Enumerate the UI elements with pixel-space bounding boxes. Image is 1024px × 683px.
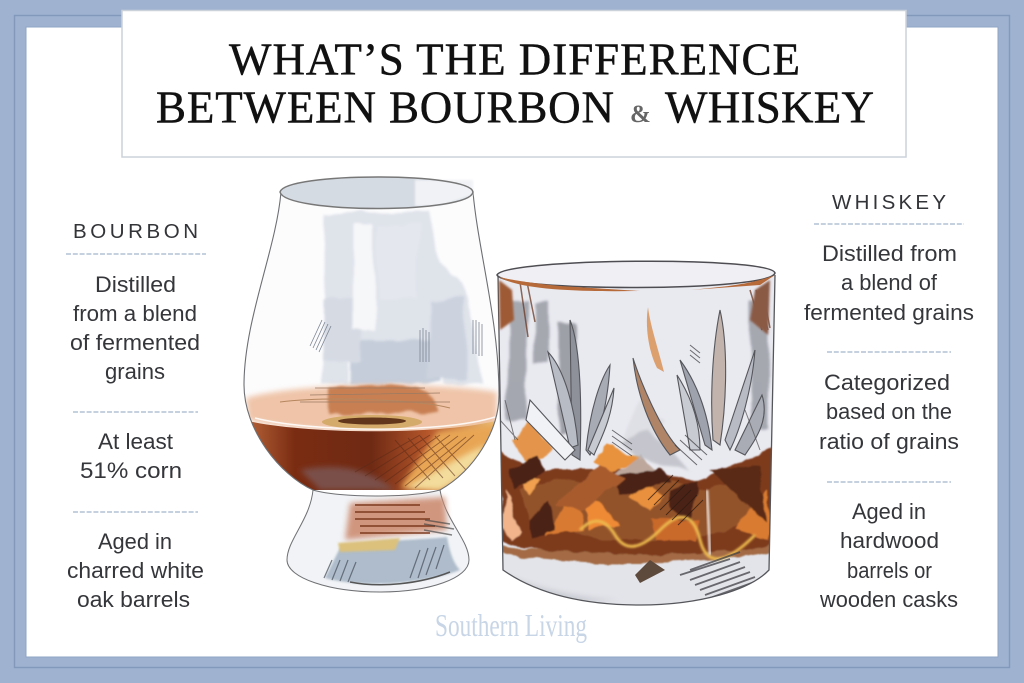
title: BETWEEN BOURBON xyxy=(156,82,614,132)
text: categorized xyxy=(819,370,959,454)
text: corn minimum xyxy=(80,429,182,483)
title: WHAT’S THE DIFFERENCE xyxy=(229,34,800,84)
text: categorized: ratio of grains xyxy=(819,429,959,454)
cut-crystal leaves xyxy=(526,310,764,460)
text: categorized: Categorized xyxy=(824,370,950,395)
text: distilled from grains: of fermented xyxy=(70,330,200,355)
text: distilled from blend xyxy=(804,241,974,325)
text: corn minimum: 51% corn xyxy=(80,458,182,483)
rim of rocks glass xyxy=(497,261,775,291)
text: distilled from grains: Distilled xyxy=(95,272,176,297)
smoky upper patches xyxy=(508,300,768,470)
heading: whiskey: WHISKEY xyxy=(832,191,946,214)
text: distilled from blend: fermented grains xyxy=(804,300,974,325)
heading: bourbon: BOURBON xyxy=(73,220,198,243)
text: distilled from blend: a blend of xyxy=(841,270,938,295)
text: hardwood barrels: hardwood xyxy=(840,528,939,553)
text: hardwood barrels: wooden casks xyxy=(819,587,958,612)
title: & xyxy=(630,101,651,128)
text: hardwood barrels xyxy=(819,499,958,612)
text: barrels: oak barrels xyxy=(77,587,190,612)
title box xyxy=(122,10,906,157)
title: WHISKEY xyxy=(665,82,874,132)
text: categorized: based on the xyxy=(826,399,952,424)
illustration: tulip whisky glass xyxy=(240,175,505,592)
panel: whiskey xyxy=(804,191,974,612)
text: barrels: Aged in xyxy=(98,529,172,554)
logo: Southern Living: Southern Living xyxy=(435,607,587,643)
panel: bourbon xyxy=(66,220,206,612)
text: distilled from grains: grains xyxy=(105,359,165,384)
text: barrels xyxy=(67,529,204,612)
glass outline xyxy=(244,192,499,490)
text: corn minimum: At least xyxy=(98,429,174,454)
foot of glass xyxy=(287,490,469,592)
rim of glass xyxy=(280,177,473,208)
text: distilled from grains: from a blend xyxy=(73,301,197,326)
title xyxy=(156,34,874,132)
whiskey body xyxy=(500,420,775,562)
text: hardwood barrels: Aged in xyxy=(852,499,926,524)
text: distilled from blend: Distilled from xyxy=(822,241,957,266)
text: distilled from grains xyxy=(70,272,200,384)
illustration: cut-crystal rocks glass xyxy=(495,261,780,610)
text: barrels: charred white xyxy=(67,558,204,583)
text: hardwood barrels: barrels or xyxy=(847,558,932,583)
